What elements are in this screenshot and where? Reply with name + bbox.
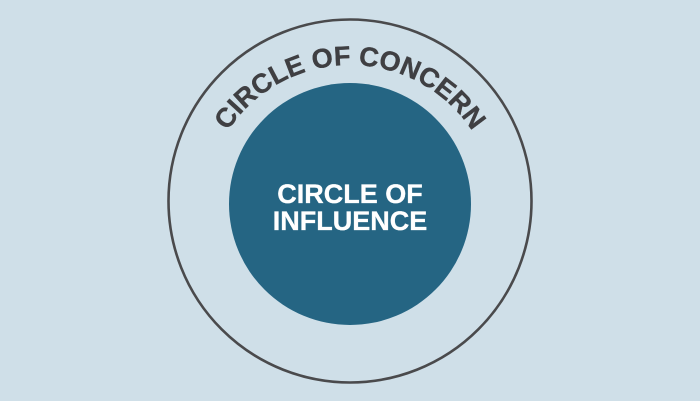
outer ring: circle of concern [168, 20, 532, 382]
curved heading: circle of concern: CIRCLE OF CONCERN [216, 46, 486, 130]
inner label: circle of influence [273, 179, 427, 236]
inner label: circle of influence: CIRCLE OF [277, 179, 423, 209]
inner label: circle of influence: INFLUENCE [273, 206, 427, 236]
inner circle: circle of influence [229, 83, 471, 325]
